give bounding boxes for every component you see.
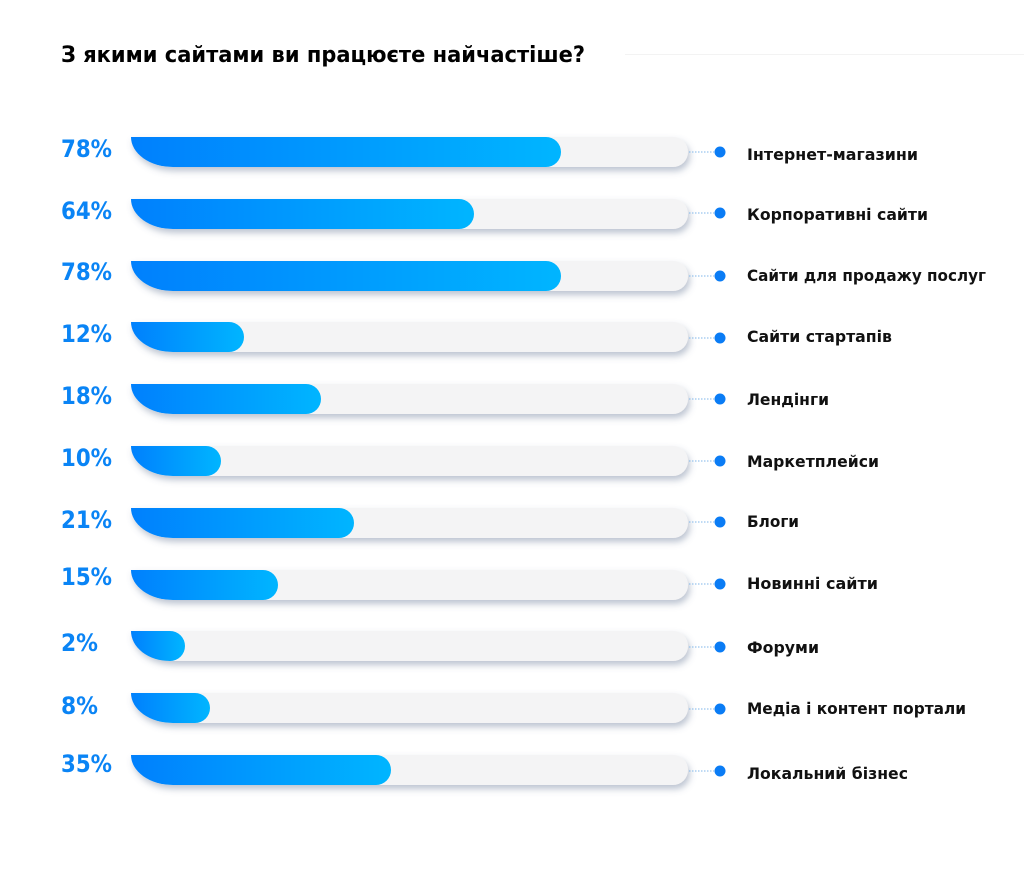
row: Інтернет-магазини 78%: 78%	[61, 135, 112, 163]
row: Форуми 2%	[61, 629, 819, 661]
row: Локальний бізнес 35%	[61, 750, 908, 785]
row: Інтернет-магазини 78%: Інтернет-магазини	[747, 145, 918, 164]
row: Сайти стартапів 12%: Сайти стартапів	[747, 327, 892, 346]
row: Сайти для продажу послуг 78%	[61, 258, 986, 291]
row: Корпоративні сайти 64%: 64%	[61, 197, 112, 225]
row: Новинні сайти 15%: 15%	[61, 563, 112, 591]
row: Локальний бізнес 35%: 35%	[61, 750, 112, 778]
row: Корпоративні сайти 64%	[61, 197, 928, 229]
row: Локальний бізнес 35%: Локальний бізнес	[747, 764, 908, 783]
row: Сайти стартапів 12%	[61, 320, 892, 352]
row: Блоги 21%: Блоги	[747, 512, 799, 531]
row: Форуми 2%: Форуми	[747, 638, 819, 657]
row: Сайти для продажу послуг 78%: 78%	[61, 258, 112, 286]
row: Блоги 21%: 21%	[61, 506, 112, 534]
title: З якими сайтами ви працюєте найчастіше?	[61, 43, 585, 68]
row: Інтернет-магазини 78%	[61, 135, 918, 167]
row: Лендінги 18%: Лендінги	[747, 390, 829, 409]
row: Корпоративні сайти 64%: Корпоративні сайти	[747, 205, 928, 224]
row: Маркетплейси 10%: Маркетплейси	[747, 452, 879, 471]
row: Маркетплейси 10%: 10%	[61, 444, 112, 472]
row: Форуми 2%: 2%	[61, 629, 98, 657]
row: Лендінги 18%	[61, 382, 829, 414]
row: Медіа і контент портали 8%	[61, 692, 966, 723]
row: Блоги 21%	[61, 506, 799, 538]
row: Медіа і контент портали 8%: Медіа і контент портали	[747, 699, 966, 718]
row: Лендінги 18%: 18%	[61, 382, 112, 410]
row: Сайти для продажу послуг 78%: Сайти для продажу послуг	[747, 266, 986, 285]
row: Медіа і контент портали 8%: 8%	[61, 692, 98, 720]
row: Маркетплейси 10%	[61, 444, 879, 476]
row: Новинні сайти 15%	[61, 563, 878, 600]
row: Новинні сайти 15%: Новинні сайти	[747, 574, 878, 593]
row: Сайти стартапів 12%: 12%	[61, 320, 112, 348]
